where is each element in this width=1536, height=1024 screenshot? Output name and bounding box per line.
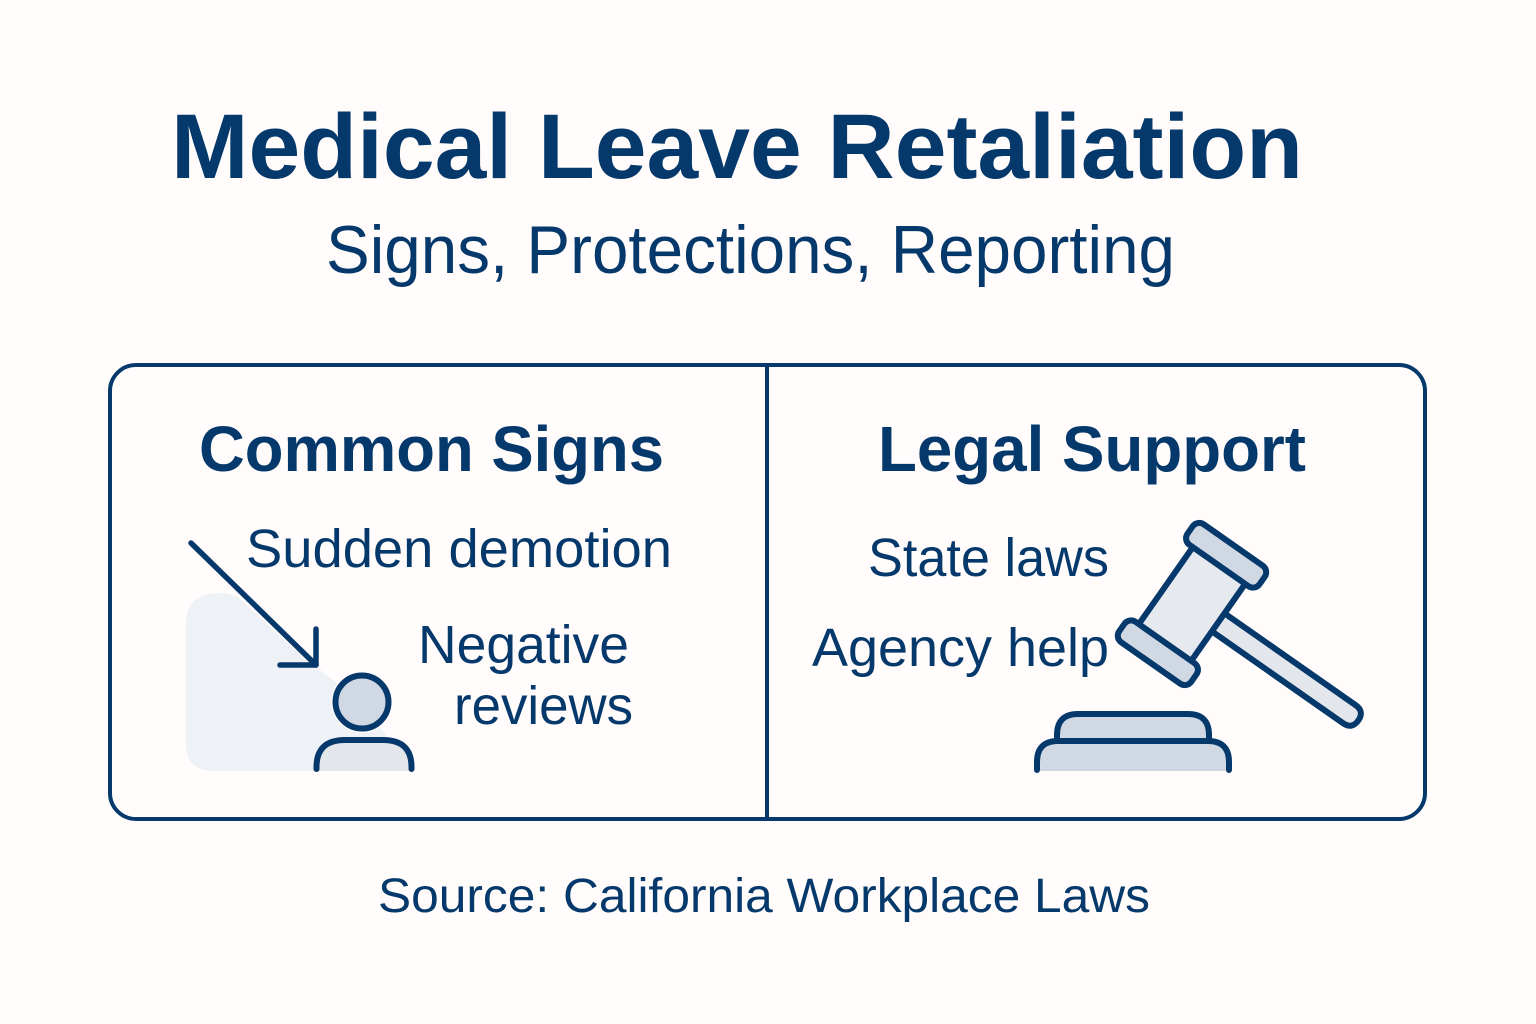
text: agency help: Agency help [812,618,1109,678]
subtitle: Signs, Protections, Reporting [326,212,1175,288]
source note: Source: California Workplace Laws [378,870,1150,923]
icon: downward arrow [191,543,316,665]
icon: shaded decline area [186,593,385,771]
panel: common signs [186,413,672,771]
text: state laws: State laws [868,528,1109,588]
text: sudden demotion: Sudden demotion [246,519,672,579]
icon: gavel sound block [1037,714,1229,771]
panel: comparison frame [110,365,1425,819]
panel: legal support [812,413,1400,779]
icon: person [316,676,412,771]
text: negative reviews: reviews [454,676,633,736]
icon: gavel [1115,520,1400,779]
text: negative reviews [418,615,633,736]
heading: legal support: Legal Support [878,413,1306,485]
heading: common signs: Common Signs [199,413,664,485]
title: Medical Leave Retaliation [171,96,1303,198]
text: negative reviews: Negative [418,615,629,675]
